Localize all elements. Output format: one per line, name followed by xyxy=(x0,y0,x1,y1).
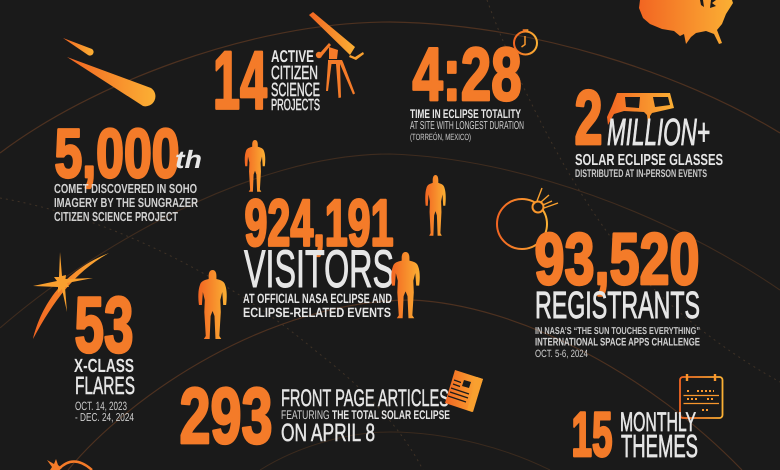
number: 15: 15 xyxy=(572,400,612,470)
description: official events: ECLIPSE-RELATED EVENTS xyxy=(243,305,391,320)
label: active citizen science projects: ACTIVE xyxy=(271,47,314,66)
number: 2: 2 xyxy=(574,75,602,161)
description: x-class flares: OCT. 14, 2023 xyxy=(75,399,127,413)
icon: newspaper xyxy=(445,370,483,412)
icon: sun and eclipse ring xyxy=(497,188,558,249)
number: 14: 14 xyxy=(213,36,267,126)
icon: telescope xyxy=(309,12,364,98)
number: 53: 53 xyxy=(74,280,134,369)
description: x-class flares: - DEC. 24, 2024 xyxy=(75,412,134,424)
panel: 14 citizen science projects xyxy=(213,12,364,126)
label: active citizen science projects xyxy=(271,47,320,114)
description: x-class flares xyxy=(74,356,135,424)
description: official events xyxy=(243,291,392,320)
description: x-class flares: X-CLASS xyxy=(74,356,134,377)
description: official events: AT OFFICIAL NASA ECLIPSE AND xyxy=(243,291,392,306)
description: solar eclipse glasses xyxy=(575,152,723,180)
description: space apps challenge: INTERNATIONAL SPACE APPS CHALLENGE xyxy=(535,336,700,348)
description: comet discovered: COMET DISCOVERED IN SOHO xyxy=(54,181,197,196)
number: 93,520: 93,520 xyxy=(534,219,700,300)
label: monthly themes: THEMES xyxy=(621,428,698,464)
label: monthly themes: MONTHLY xyxy=(620,407,696,437)
panel: 2 million glasses xyxy=(574,75,723,180)
description: time in totality: (TORREÓN, MEXICO) xyxy=(410,132,471,142)
description: front page articles: FEATURING THE TOTAL SOLAR ECLIPSE xyxy=(281,408,450,422)
panel: 4:28 totality xyxy=(410,30,537,142)
description: solar eclipse glasses: SOLAR ECLIPSE GLASSES xyxy=(575,152,723,169)
description: time in totality: AT SITE WITH LONGEST DURATION xyxy=(410,120,524,132)
panel: 5,000th comet xyxy=(54,115,202,224)
panel: 15 monthly themes xyxy=(572,374,722,470)
icon: person silhouette 4 xyxy=(391,252,420,318)
description: space apps challenge xyxy=(535,326,700,360)
ordinal suffix: th: th xyxy=(175,146,202,174)
description: comet discovered: CITIZEN SCIENCE PROJECT xyxy=(54,209,178,224)
icon: map of the United States xyxy=(639,0,733,44)
icon: clock xyxy=(514,30,537,54)
label: MILLION+: MILLION+ xyxy=(607,112,710,154)
description: x-class flares: FLARES xyxy=(75,372,135,400)
label: VISITORS: VISITORS xyxy=(244,240,394,299)
label: active citizen science projects: CITIZEN xyxy=(271,63,318,84)
icon: person silhouette 1 xyxy=(245,140,265,192)
label: monthly themes xyxy=(620,407,698,464)
description: comet discovered xyxy=(54,181,198,224)
panel: 924,191 visitors xyxy=(198,140,446,339)
number: 293: 293 xyxy=(180,371,272,460)
icon: eclipse glasses xyxy=(607,93,674,125)
label: active citizen science projects: PROJECTS xyxy=(271,97,320,114)
icon: partial eclipse ring at bottom xyxy=(47,459,92,470)
description: comet discovered: IMAGERY BY THE SUNGRAZER xyxy=(54,195,198,210)
description: front page articles xyxy=(281,385,450,447)
icon: calendar xyxy=(680,374,722,418)
description: space apps challenge: OCT. 5-6, 2024 xyxy=(535,348,588,360)
description: space apps challenge: IN NASA’S “THE SUN TOUCHES EVERYTHING” xyxy=(535,326,700,337)
panel: 293 front page articles xyxy=(180,370,483,460)
description: time in totality xyxy=(410,107,524,142)
number: 924,191: 924,191 xyxy=(244,186,394,260)
description: front page articles: FRONT PAGE ARTICLES xyxy=(281,385,449,412)
label: active citizen science projects: SCIENCE xyxy=(271,80,320,101)
description: time in totality: TIME IN ECLIPSE TOTALITY xyxy=(410,107,521,121)
icon: comets xyxy=(63,38,155,106)
icon: person silhouette 3 xyxy=(198,270,227,339)
panel: 53 X-class flares xyxy=(33,252,135,424)
description: front page articles: ON APRIL 8 xyxy=(281,419,375,447)
description: solar eclipse glasses: DISTRIBUTED AT IN-PERSON EVENTS xyxy=(575,168,707,180)
icon: person silhouette 2 xyxy=(425,175,446,236)
panel: 93,520 registrants xyxy=(497,188,700,360)
number: 5,000: 5,000 xyxy=(54,115,180,192)
number: 4:28: 4:28 xyxy=(412,32,522,116)
icon: solar flare xyxy=(33,252,109,339)
